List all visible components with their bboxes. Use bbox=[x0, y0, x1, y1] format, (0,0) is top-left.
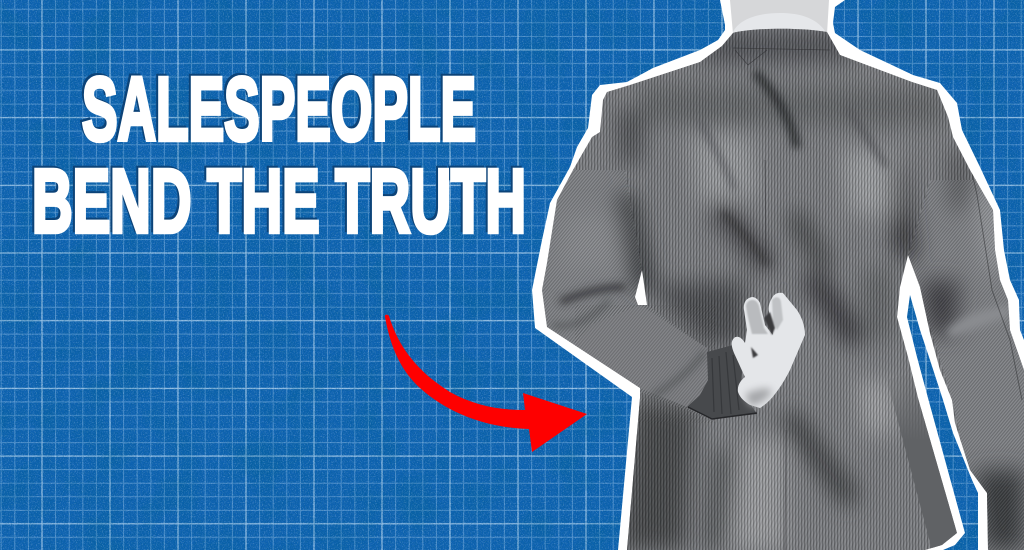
suit jacket bbox=[530, 20, 1024, 550]
shirt collar bbox=[733, 13, 827, 34]
fold creases bbox=[700, 72, 887, 265]
crossed fingers hand bbox=[732, 293, 805, 408]
jacket broad shading bbox=[560, 32, 1024, 550]
sleeve weave bbox=[530, 170, 1024, 550]
white cut-out outline bbox=[532, 0, 1024, 550]
title bbox=[32, 60, 526, 252]
right arm seam bbox=[972, 172, 1022, 400]
wrist shading bbox=[745, 388, 772, 406]
right arm light crease bbox=[947, 306, 1010, 338]
left forearm bbox=[576, 305, 708, 407]
armpit white gap bbox=[635, 270, 647, 305]
coat flap bbox=[887, 372, 957, 550]
title: BEND THE TRUTH bbox=[32, 152, 526, 252]
jacket cuff bbox=[687, 345, 757, 419]
red curved arrow bbox=[385, 315, 587, 452]
cuff hem bbox=[688, 407, 757, 419]
businessman seen from behind bbox=[530, 0, 1024, 550]
neck bbox=[730, 0, 829, 34]
cuff stripes bbox=[712, 352, 739, 414]
finger shading bbox=[746, 300, 768, 334]
title: SALESPEOPLE bbox=[82, 60, 476, 160]
centre back seam bbox=[765, 160, 786, 550]
gap between fingers bbox=[751, 312, 775, 358]
back yoke seam bbox=[733, 48, 830, 65]
second finger shading bbox=[772, 297, 783, 330]
sleeve creases bbox=[552, 287, 705, 396]
back fabric stripes bbox=[573, 28, 976, 550]
